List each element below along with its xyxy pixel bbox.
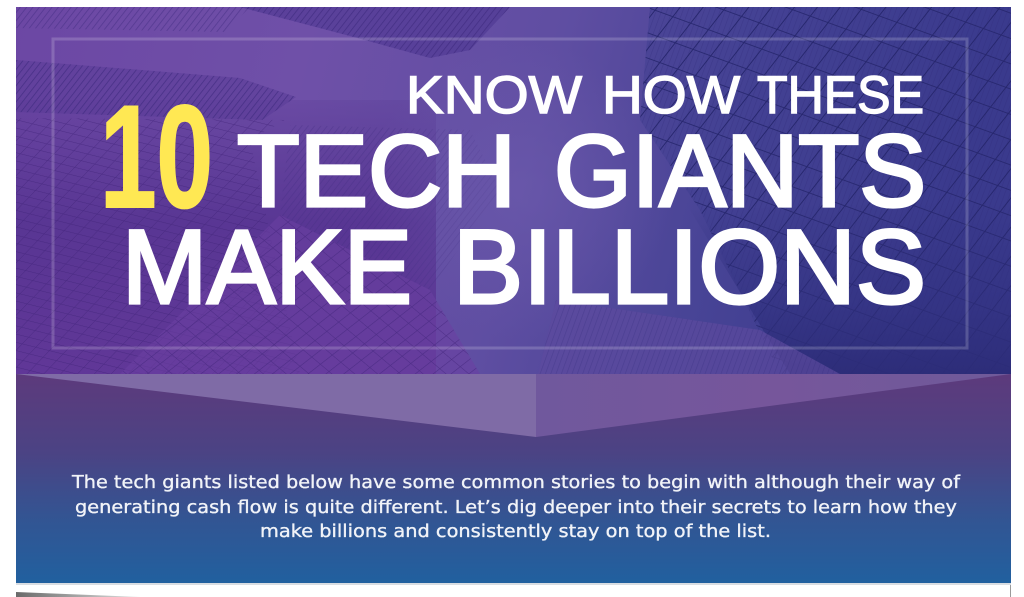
panel: intro band bbox=[16, 374, 1011, 583]
title line: make billions: MAKE bbox=[122, 209, 412, 326]
lower centre building bbox=[120, 215, 480, 374]
title frame bbox=[53, 39, 967, 348]
title line: make billions: BILLIONS bbox=[453, 209, 926, 326]
next section wedge bbox=[16, 592, 140, 597]
title line: know how these: KNOW bbox=[406, 66, 582, 125]
top centre building bbox=[240, 7, 510, 58]
title line: make billions bbox=[122, 209, 926, 326]
title line: know how these: HOW bbox=[602, 66, 740, 125]
intro text: The tech giants listed below have some common stories to begin with although their way of bbox=[71, 472, 961, 493]
title line: tech giants: GIANTS bbox=[554, 114, 926, 228]
title line: know how these: THESE bbox=[757, 66, 924, 125]
title line: tech giants bbox=[237, 114, 926, 228]
right tower bbox=[640, 7, 699, 156]
left building ledge band bbox=[16, 60, 296, 120]
panel: hero image with skyscrapers bbox=[16, 7, 1011, 374]
band bottom edge bbox=[16, 583, 1011, 585]
lower right shade bbox=[726, 267, 1011, 374]
chevron banner bbox=[16, 374, 1011, 437]
title line: tech giants: TECH bbox=[237, 114, 516, 228]
title line: know how these bbox=[406, 66, 924, 125]
bottom centre tower bbox=[593, 308, 840, 374]
intro text: make billions and consistently stay on top of the list. bbox=[260, 521, 771, 542]
title bbox=[100, 66, 926, 326]
left building, lower dark tone bbox=[16, 100, 436, 374]
right edge line bbox=[1010, 585, 1011, 597]
centre glow bbox=[424, 141, 576, 240]
title number: 10: 10 bbox=[100, 75, 213, 238]
intro text bbox=[71, 472, 961, 542]
intro text: generating cash flow is quite different. Let’s dig deeper into their secrets to learn how they bbox=[75, 497, 957, 518]
